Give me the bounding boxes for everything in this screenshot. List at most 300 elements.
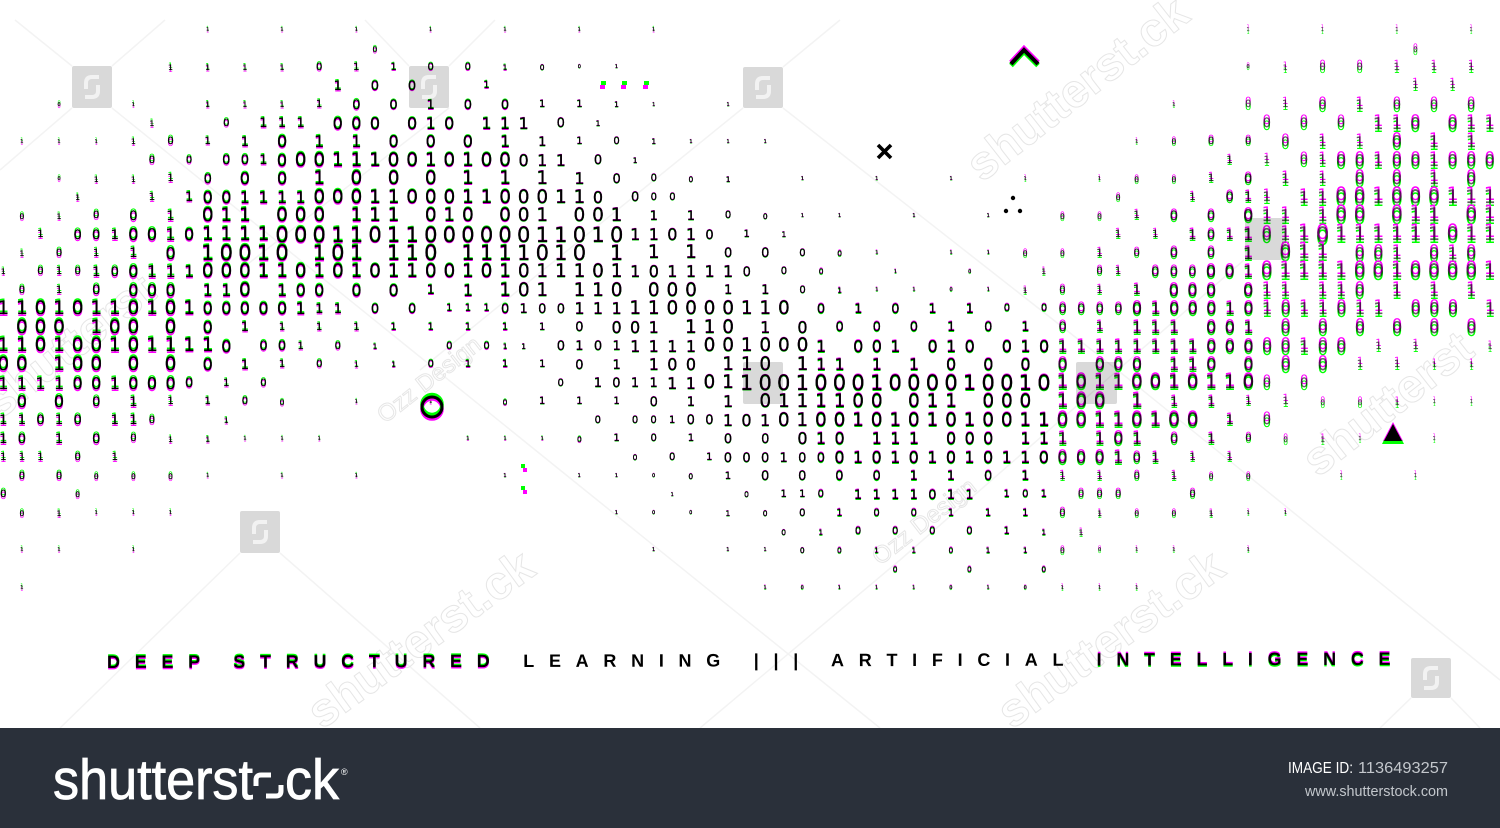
binary digit wave field: 01 110 000: [518, 280, 704, 301]
binary digit wave field: 011010: [517, 223, 629, 247]
binary digit wave field: 1: [373, 342, 391, 351]
binary digit wave field: 0 1: [19, 285, 74, 296]
binary digit wave field: 001: [222, 153, 278, 168]
binary digit wave field: 01: [778, 410, 815, 431]
binary digit wave field: 1 0 0 1: [1097, 509, 1227, 518]
binary digit wave field: 0011: [518, 187, 592, 208]
binary digit wave field: 0: [688, 472, 707, 481]
binary digit wave field: 11: [1299, 188, 1336, 207]
binary digit wave field: 1111001000: [0, 374, 184, 393]
binary digit wave field: 0 1: [129, 209, 185, 224]
binary digit wave field: 0 1: [57, 102, 150, 108]
binary digit wave field: 0: [0, 489, 19, 500]
footer bar: [0, 728, 1500, 828]
binary digit wave field: 11: [780, 489, 818, 500]
binary digit wave field: 0: [223, 118, 242, 129]
binary digit wave field: 10110010110: [1057, 372, 1261, 393]
icon: ring: [422, 394, 442, 419]
binary digit wave field: 0: [501, 302, 520, 317]
binary digit wave field: 111 0 1: [0, 452, 130, 463]
binary digit wave field: 1 0 0: [615, 510, 708, 516]
binary digit wave field: 1 1: [652, 102, 745, 108]
binary digit wave field: 0 1 1 0 1 1: [837, 546, 1041, 555]
binary digit wave field: 1111: [630, 337, 704, 356]
binary digit wave field: 1: [1, 267, 20, 276]
binary digit wave field: 1: [168, 435, 187, 444]
icon: two vertical dots: [521, 464, 527, 494]
shutterstock logo: shutterst: [53, 748, 253, 812]
binary digit wave field: 1 1 1: [689, 139, 782, 145]
binary digit wave field: 000 100 0: [16, 317, 183, 338]
binary digit wave field: 0 0 1 1 0 1: [835, 469, 1040, 484]
binary digit wave field: 00 100 0 0: [0, 354, 183, 375]
binary digit wave field: 11 010 0: [369, 205, 518, 226]
binary digit wave field: 0001: [1057, 448, 1132, 467]
binary digit wave field: 0: [221, 337, 240, 356]
binary digit wave field: 0 1 1 1: [1098, 547, 1265, 553]
binary digit wave field: 0: [277, 151, 296, 170]
binary digit wave field: 11: [203, 281, 240, 300]
binary digit wave field: 1 1: [94, 175, 150, 184]
binary digit wave field: 0 0 0 1 0 1: [835, 320, 1040, 335]
binary digit wave field: 00 011 01: [1335, 205, 1500, 226]
binary digit wave field: 1: [499, 280, 518, 301]
binary digit wave field: 0: [1245, 433, 1264, 444]
binary digit wave field: 1: [1227, 452, 1245, 463]
binary digit wave field: 011: [1280, 242, 1335, 263]
binary digit wave field: 0: [799, 248, 818, 259]
binary digit wave field: 01: [704, 372, 741, 393]
binary digit wave field: 0: [204, 172, 222, 187]
binary digit wave field: 01 001: [518, 205, 629, 226]
binary digit wave field: 0: [744, 490, 763, 499]
binary digit wave field: 011: [519, 151, 574, 170]
binary digit wave field: 0 1: [1058, 320, 1114, 335]
binary digit wave field: 1: [725, 471, 743, 482]
binary digit wave field: 0: [819, 267, 837, 276]
binary digit wave field: 1111011: [854, 488, 984, 503]
binary digit wave field: 1 1 1: [466, 436, 559, 442]
binary digit wave field: 000: [313, 187, 369, 208]
binary digit wave field: 0: [817, 451, 835, 466]
binary digit wave field: 1 1 1: [95, 510, 188, 516]
binary digit wave field: 1 1: [1340, 473, 1432, 479]
binary digit wave field: 101111: [630, 262, 742, 281]
binary digit wave field: 1 1: [1247, 510, 1302, 516]
binary digit wave field: 110000110: [629, 298, 797, 319]
binary digit wave field: 1: [503, 63, 521, 72]
binary digit wave field: 1 1 1: [20, 547, 150, 553]
binary digit wave field: 0 0: [1170, 246, 1225, 261]
binary digit wave field: 0: [558, 378, 576, 389]
binary digit wave field: 1: [427, 283, 445, 298]
binary digit wave field: 00: [687, 413, 724, 428]
image id: 1136493257: [1358, 760, 1448, 777]
binary digit wave field: 1001: [740, 371, 814, 395]
binary digit wave field: 0: [1263, 413, 1281, 428]
binary digit wave field: 011101: [518, 261, 629, 282]
binary digit wave field: 1: [483, 80, 502, 91]
binary digit wave field: 1: [241, 358, 259, 373]
binary digit wave field: 1 0: [726, 509, 781, 518]
binary digit wave field: 0: [1244, 172, 1263, 187]
binary digit wave field: 000 0: [1169, 281, 1262, 300]
binary digit wave field: 1: [1189, 192, 1208, 203]
binary digit wave field: 0: [818, 489, 836, 500]
binary digit wave field: 1: [1041, 267, 1060, 276]
binary digit wave field: 0: [503, 398, 521, 407]
binary digit wave field: 01: [1096, 266, 1134, 277]
binary digit wave field: 1 1: [1357, 359, 1413, 370]
watermark: faint diagonal lattice and shutterstock lettering: Ozz Design: [372, 331, 486, 429]
binary digit wave field: 0 1 1: [1281, 135, 1374, 150]
binary digit wave field: 010: [37, 266, 93, 277]
binary digit wave field: 0: [352, 98, 371, 112]
binary digit wave field: 0: [800, 546, 818, 555]
binary digit wave field: 0 0: [1023, 249, 1079, 258]
binary digit wave field: 1: [1041, 528, 1060, 537]
binary digit wave field: 0 0 0: [893, 565, 1060, 574]
binary digit wave field: 1: [185, 190, 204, 205]
binary digit wave field: 0 1: [19, 509, 75, 518]
binary digit wave field: 1: [1245, 396, 1264, 407]
binary digit wave field: 1: [1023, 286, 1041, 295]
binary digit wave field: 0: [75, 490, 94, 499]
binary digit wave field: 0 1: [1245, 99, 1301, 110]
binary digit wave field: 1: [1283, 63, 1302, 72]
binary digit wave field: 1 0: [279, 359, 335, 370]
binary digit wave field: 1 1 1: [801, 176, 968, 182]
binary digit wave field: 1 1 1: [875, 250, 1005, 256]
binary digit wave field: 11: [315, 302, 352, 317]
binary digit wave field: 00: [259, 339, 297, 354]
binary digit wave field: 110: [685, 317, 741, 338]
binary digit wave field: 0 1: [316, 62, 372, 73]
binary digit wave field: 1: [129, 246, 148, 261]
binary digit wave field: 1: [1133, 283, 1151, 298]
binary digit wave field: 000: [1151, 265, 1207, 280]
binary digit wave field: 1: [184, 262, 203, 281]
binary digit wave field: 101: [1004, 489, 1059, 500]
binary digit wave field: 0: [149, 415, 167, 426]
binary digit wave field: 1: [241, 135, 259, 150]
title: DEEP STRUCTURED LEARNING ||| ARTIFICIAL INTELLIGENCE: [107, 649, 1405, 672]
binary digit wave field: 001: [632, 415, 688, 426]
binary digit wave field: 0 0: [371, 79, 426, 94]
binary digit wave field: 10 111 000 11: [816, 429, 1058, 448]
binary digit wave field: 1 1 1: [279, 322, 372, 333]
binary digit wave field: 1 1: [1432, 360, 1488, 369]
binary digit wave field: 1101001011: [0, 335, 183, 356]
watermark squares: [72, 66, 1451, 698]
binary digit wave field: 1: [1079, 528, 1097, 537]
binary digit wave field: 10010100: [369, 150, 518, 170]
binary digit wave field: 0: [184, 225, 203, 244]
binary digit wave field: 1: [837, 286, 856, 295]
binary digit wave field: 1: [596, 119, 614, 128]
binary digit wave field: 10010 101: [201, 241, 368, 265]
binary digit wave field: 1 001 010 010: [816, 337, 1058, 356]
binary digit wave field: 111 001: [1132, 318, 1262, 337]
binary digit wave field: 0 0: [761, 469, 817, 484]
binary digit wave field: 1: [744, 229, 762, 240]
icon: triangle: [1382, 422, 1404, 444]
binary digit wave field: 1: [1134, 210, 1152, 221]
binary digit wave field: 011: [759, 391, 815, 412]
binary digit wave field: 0: [540, 63, 558, 72]
binary digit wave field: 1 1: [1433, 399, 1488, 405]
binary digit wave field: 110 111: [387, 241, 517, 265]
binary digit wave field: 0 0 0 1: [388, 132, 519, 151]
binary digit wave field: 1: [1226, 413, 1244, 428]
binary digit wave field: 1: [391, 360, 410, 369]
binary digit wave field: 1: [19, 249, 38, 258]
binary digit wave field: 101: [1188, 228, 1244, 243]
binary digit wave field: 0: [631, 190, 650, 205]
binary digit wave field: 0: [372, 45, 391, 54]
icon: three dashes: [600, 81, 649, 89]
binary digit wave field: 1 0: [223, 378, 279, 389]
binary digit wave field: 1: [1264, 155, 1282, 166]
binary digit wave field: 110 1: [722, 354, 815, 375]
binary digit wave field: 000001: [203, 299, 314, 318]
binary digit wave field: 0000: [1059, 302, 1133, 317]
binary digit wave field: 01100000: [368, 223, 517, 247]
binary digit wave field: 1: [183, 298, 202, 319]
binary digit wave field: 1 101: [1058, 429, 1150, 448]
binary digit wave field: 111: [574, 299, 630, 318]
binary digit wave field: 1 0: [576, 136, 632, 147]
binary digit wave field: 001111: [203, 188, 314, 207]
binary digit wave field: 0: [1243, 206, 1262, 225]
binary digit wave field: 0: [557, 116, 575, 131]
binary digit wave field: 0: [593, 188, 612, 207]
binary digit wave field: 0 1: [56, 248, 112, 259]
binary digit wave field: 0 1 1: [428, 359, 521, 370]
binary digit wave field: 0101: [557, 339, 631, 354]
binary digit wave field: 0 1: [92, 395, 148, 410]
binary digit wave field: 1: [149, 192, 167, 203]
binary digit wave field: 0010101010011: [815, 410, 1057, 431]
binary digit wave field: 1 1 1: [539, 396, 632, 407]
binary digit wave field: 1: [1226, 155, 1245, 166]
binary digit wave field: 1: [539, 359, 558, 370]
binary digit wave field: 0 1: [1170, 432, 1226, 447]
binary digit wave field: 10: [92, 265, 129, 280]
binary digit wave field: 11010 11: [0, 413, 148, 428]
binary digit wave field: 001001000: [1336, 151, 1500, 170]
binary digit wave field: 0: [725, 210, 744, 221]
binary digit wave field: 1: [241, 320, 259, 335]
binary digit wave field: 0: [705, 228, 724, 243]
binary digit wave field: 0 0: [240, 169, 296, 188]
binary digit wave field: 0 1: [578, 64, 634, 70]
binary digit wave field: 1: [671, 492, 689, 498]
binary digit wave field: 1011011 000 1: [1262, 299, 1500, 318]
binary digit wave field: 0: [165, 244, 184, 263]
binary digit wave field: 1 0 1: [613, 433, 706, 444]
binary digit wave field: 0: [799, 508, 818, 519]
binary digit wave field: 0011: [295, 150, 369, 170]
binary digit wave field: 01: [1300, 153, 1337, 168]
binary digit wave field: 00100: [1262, 337, 1355, 356]
binary digit wave field: 1: [167, 173, 186, 184]
binary digit wave field: 0 0: [17, 392, 73, 411]
binary digit wave field: 0 1 0 0: [389, 98, 519, 112]
binary digit wave field: 0 1: [575, 358, 631, 373]
binary digit wave field: 1 1: [1281, 172, 1337, 187]
binary digit wave field: 1 0: [1096, 248, 1152, 259]
binary digit wave field: 1: [1189, 452, 1208, 463]
binary digit wave field: 0: [763, 212, 781, 221]
binary digit wave field: 1 0: [313, 168, 369, 189]
binary digit wave field: 0: [167, 136, 186, 147]
binary digit wave field: 111: [446, 303, 502, 314]
binary digit wave field: 001: [1206, 262, 1262, 281]
binary digit wave field: 1011: [594, 376, 668, 391]
binary digit wave field: 1 1 0 1: [875, 287, 1005, 293]
binary digit wave field: 0 1: [650, 395, 705, 410]
binary digit wave field: 11 110 1 1 1: [1262, 281, 1485, 300]
binary digit wave field: 1 1: [724, 283, 780, 298]
binary digit wave field: 11000110: [369, 187, 518, 208]
binary digit wave field: 0: [93, 210, 112, 221]
binary digit wave field: 1 1 1: [1061, 585, 1154, 591]
binary digit wave field: 0 1 1: [1392, 132, 1485, 151]
binary digit wave field: 0 0: [371, 302, 427, 317]
image id: [1288, 760, 1448, 777]
binary digit wave field: 1 1: [1375, 341, 1431, 352]
binary digit wave field: 0: [1316, 223, 1334, 247]
binary digit wave field: 011: [128, 262, 184, 281]
binary digit wave field: 0 0 1 1 1: [1319, 62, 1487, 73]
binary digit wave field: 0: [575, 320, 594, 335]
binary digit wave field: 01: [1133, 451, 1170, 466]
binary digit wave field: 1 1 1: [205, 63, 298, 72]
binary digit wave field: 0 0 0: [94, 472, 187, 481]
binary digit wave field: 001000: [704, 335, 815, 356]
binary digit wave field: 1 1: [1412, 80, 1468, 91]
binary digit wave field: 0: [1247, 64, 1265, 70]
binary digit wave field: 001: [128, 225, 184, 244]
binary digit wave field: 1: [205, 435, 224, 444]
binary digit wave field: 1 1: [1115, 229, 1171, 240]
shutterstock logo: ck: [285, 748, 339, 812]
binary digit wave field: 1: [1263, 190, 1281, 205]
binary digit wave field: 1: [354, 360, 373, 369]
binary digit wave field: 11111111000: [1058, 337, 1262, 356]
binary digit wave field: 0: [185, 376, 204, 391]
binary digit wave field: 1: [20, 585, 39, 591]
icon: three dots: [1004, 196, 1022, 213]
binary digit wave field: 1: [521, 342, 540, 351]
binary digit wave field: 0: [280, 398, 298, 407]
binary digit wave field: 0: [594, 153, 612, 168]
binary digit wave field: 1: [334, 79, 352, 94]
binary digit wave field: 1101: [630, 225, 704, 244]
binary digit wave field: 111: [259, 116, 315, 131]
binary digit wave field: 0 0: [724, 246, 780, 261]
binary digit wave field: 1: [75, 193, 94, 202]
binary digit wave field: 0: [186, 155, 205, 166]
binary digit wave field: 1111: [202, 224, 276, 245]
binary digit wave field: 110 011: [1373, 114, 1500, 133]
watermark: faint diagonal lattice and shutterstock lettering: Ozz Design: [867, 473, 981, 571]
binary digit wave field: 0: [203, 318, 221, 337]
binary digit wave field: 0 0: [446, 341, 502, 352]
binary digit wave field: 1 1 1 1: [801, 213, 1005, 219]
binary digit wave field: 0: [1171, 137, 1190, 146]
binary digit wave field: 0: [149, 155, 167, 166]
binary digit wave field: 11: [667, 374, 704, 393]
binary digit wave field: 0 0: [724, 432, 780, 447]
watermark: faint diagonal lattice and shutterstock lettering: shutterst: [1292, 320, 1483, 486]
binary digit wave field: 1: [1172, 102, 1191, 108]
binary digit wave field: 1: [538, 135, 557, 150]
binary digit wave field: 010101010110: [834, 448, 1057, 467]
binary digit wave field: 1: [224, 416, 242, 425]
binary digit wave field: 0 0 1 1: [388, 168, 518, 189]
icon: cross: [878, 145, 891, 158]
binary digit wave field: 0 1 0 0 0: [1318, 98, 1486, 112]
binary digit wave field: 0: [837, 249, 856, 258]
website url: www.shutterstock.com: [1304, 783, 1448, 800]
binary digit wave field: 1: [818, 528, 837, 537]
binary digit wave field: 0: [1413, 45, 1432, 54]
binary digit wave field: 00110100: [1057, 410, 1205, 431]
binary digit wave field: 00011: [275, 223, 368, 247]
binary digit wave field: 1 0: [297, 341, 353, 352]
binary digit wave field: 0 0 1 0: [1355, 169, 1485, 188]
binary digit wave field: 10 1 0: [0, 432, 111, 447]
binary digit wave field: 1: [37, 229, 56, 240]
icon: chevron: [1011, 48, 1038, 66]
binary digit wave field: 100: [649, 355, 704, 374]
binary digit wave field: 100: [520, 302, 575, 317]
binary digit wave field: 1: [539, 322, 558, 333]
binary digit wave field: 0: [1116, 193, 1134, 202]
binary digit wave field: 000110101: [202, 261, 369, 282]
binary digit wave field: 0: [92, 283, 111, 298]
binary digit wave field: 0 1: [669, 452, 725, 463]
binary digit wave field: 00: [333, 114, 370, 133]
binary digit wave field: 0 0: [1170, 209, 1225, 224]
binary digit wave field: 1: [1243, 225, 1262, 244]
binary digit wave field: 1 1: [539, 99, 595, 110]
binary digit wave field: 1: [536, 168, 555, 189]
binary digit wave field: 1: [150, 119, 168, 128]
binary digit wave field: 0111100100001: [1261, 261, 1500, 282]
binary digit wave field: 1: [1298, 224, 1317, 245]
binary digit wave field: 0: [203, 355, 221, 374]
binary digit wave field: 0 0: [1134, 175, 1190, 184]
binary digit wave field: 1: [723, 392, 742, 411]
binary digit wave field: 01: [1262, 225, 1299, 244]
binary digit wave field: 001: [611, 318, 667, 337]
binary digit wave field: 0: [651, 173, 669, 184]
binary digit wave field: 0 0 1: [1320, 398, 1413, 407]
binary digit wave field: 1 1 1: [206, 473, 373, 479]
binary digit wave field: 0: [595, 415, 613, 426]
binary digit wave field: 00010: [724, 451, 817, 466]
binary digit wave field: 000: [128, 281, 184, 300]
binary digit wave field: 1 0 0 1 1 1: [836, 508, 1041, 519]
binary digit wave field: 11 1 1 0 0 0: [816, 355, 1039, 374]
binary digit wave field: 1: [782, 230, 800, 239]
binary digit wave field: 0: [1060, 546, 1079, 555]
binary digit wave field: 0 010 11: [370, 114, 519, 133]
binary digit wave field: 01100101: [369, 261, 518, 282]
